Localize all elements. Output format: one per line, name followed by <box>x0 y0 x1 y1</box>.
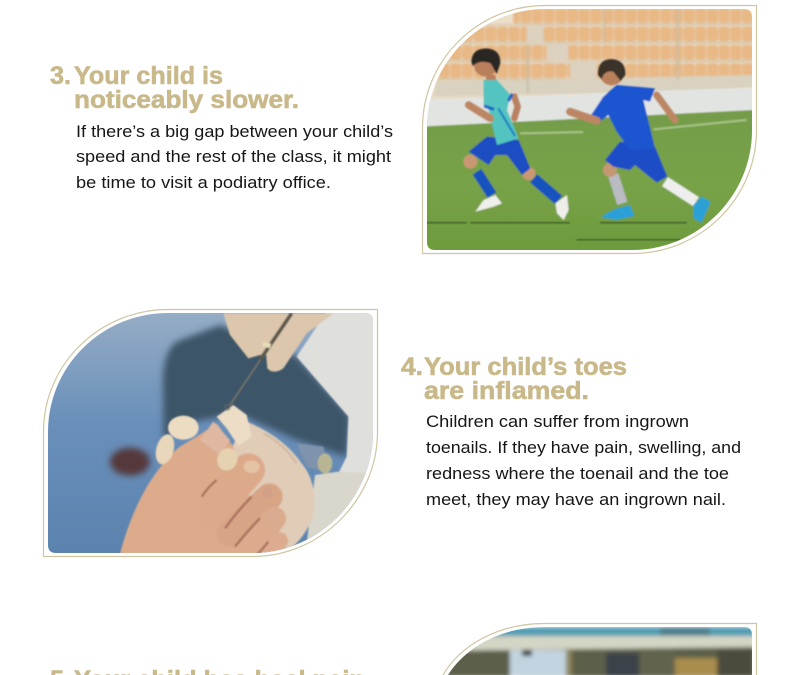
section 4: heading: Your child’s toes <box>424 353 627 381</box>
section 4: body text: Children can suffer from ingrown <box>426 412 689 431</box>
section 3: body text: speed and the rest of the class, it might <box>76 147 391 166</box>
section 3: body text: If there’s a big gap between your child’s <box>76 122 393 141</box>
section 4: body text: redness where the toenail and the toe <box>426 464 729 483</box>
section 3: heading: noticeably slower. <box>74 86 299 114</box>
section 3: body text <box>76 122 393 192</box>
photo: two boys running on a stadium field <box>420 0 757 257</box>
section 4: body text: toenails. If they have pain, swelling, and <box>426 438 741 457</box>
section 3: heading: Your child is <box>74 62 223 90</box>
section 4: body text: meet, they may have an ingrown nail. <box>426 490 726 509</box>
photo: podiatrist treating a child's ingrown toenail <box>43 307 380 563</box>
section 4: body text <box>426 412 741 509</box>
section 3: heading <box>50 62 299 114</box>
section 4: heading <box>401 353 627 405</box>
section 3: heading: 3. <box>50 62 71 90</box>
section 4: heading: 4. <box>401 353 423 381</box>
photo: building with doors (cropped by page edge) <box>420 624 756 675</box>
section 3: body text: be time to visit a podiatry office. <box>76 173 331 192</box>
section 4: heading: are inflamed. <box>424 377 589 405</box>
